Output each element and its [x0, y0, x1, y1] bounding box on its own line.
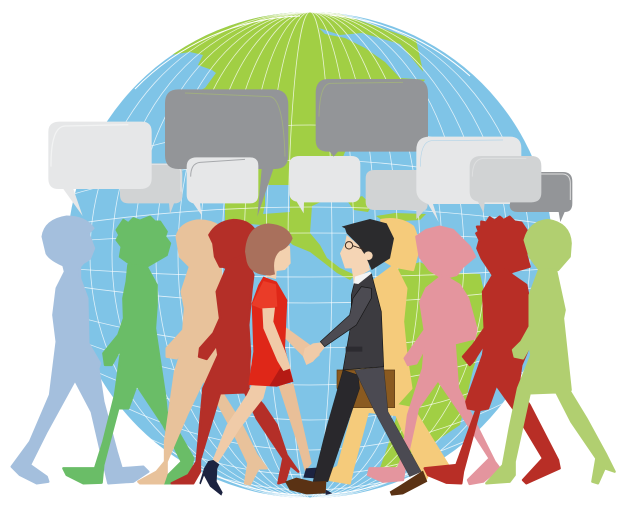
land: south america — [380, 262, 486, 468]
bubble: large dark grey left — [165, 89, 288, 217]
map grid — [60, 12, 560, 498]
silhouette: blue person — [12, 217, 148, 483]
sleeve — [320, 287, 371, 347]
neck and face — [266, 246, 291, 279]
man head — [340, 219, 394, 284]
near trouser leg — [313, 370, 360, 482]
speech bubbles — [48, 79, 572, 222]
dress — [248, 277, 293, 387]
bubble: large dark grey right — [316, 79, 428, 157]
man in suit — [285, 273, 427, 496]
briefcase — [337, 370, 395, 408]
silhouette: yellow person — [328, 219, 448, 483]
land: north america — [170, 0, 425, 280]
back shoe sole — [326, 490, 332, 495]
woman in red dress — [199, 277, 320, 496]
back shoe — [285, 478, 326, 494]
silhouette: tan person — [138, 221, 267, 484]
water channel — [319, 28, 430, 80]
bubble: light grey middle — [289, 156, 360, 213]
front leg — [212, 385, 267, 462]
far arm — [283, 327, 320, 363]
hair — [342, 219, 394, 270]
jacket — [343, 273, 384, 370]
bay of blue water — [263, 185, 290, 214]
hand — [303, 342, 325, 365]
collar — [354, 272, 372, 284]
dress shadow — [269, 358, 293, 387]
bubble: light grey large right — [416, 137, 521, 222]
silhouette: red person — [425, 217, 560, 483]
near arm and hand — [262, 308, 291, 371]
bubble: pale grey centre right — [366, 170, 428, 219]
globe — [60, 0, 560, 498]
pocket — [346, 347, 362, 352]
back leg — [278, 383, 312, 472]
hair — [245, 223, 293, 276]
glasses — [345, 242, 363, 249]
bubble: dark grey far right — [510, 172, 572, 222]
bubble: pale grey back left — [120, 163, 182, 214]
silhouette: pink person — [368, 227, 500, 484]
silhouette: dark red woman — [172, 220, 298, 483]
bubble: pale grey right — [470, 156, 541, 213]
front shoe — [390, 471, 427, 496]
ear — [364, 251, 373, 260]
silhouette: green person — [63, 217, 193, 483]
silhouette: olive person — [486, 220, 615, 483]
land: small islands — [348, 196, 426, 222]
sleeve — [252, 281, 277, 309]
bubble: light grey far left — [48, 122, 152, 216]
woman head — [245, 223, 293, 279]
face and neck — [340, 235, 370, 283]
high heel shoe — [199, 460, 223, 496]
bubble: light grey centre left — [187, 157, 258, 215]
far trouser leg — [355, 367, 421, 477]
back shoe — [303, 468, 317, 478]
